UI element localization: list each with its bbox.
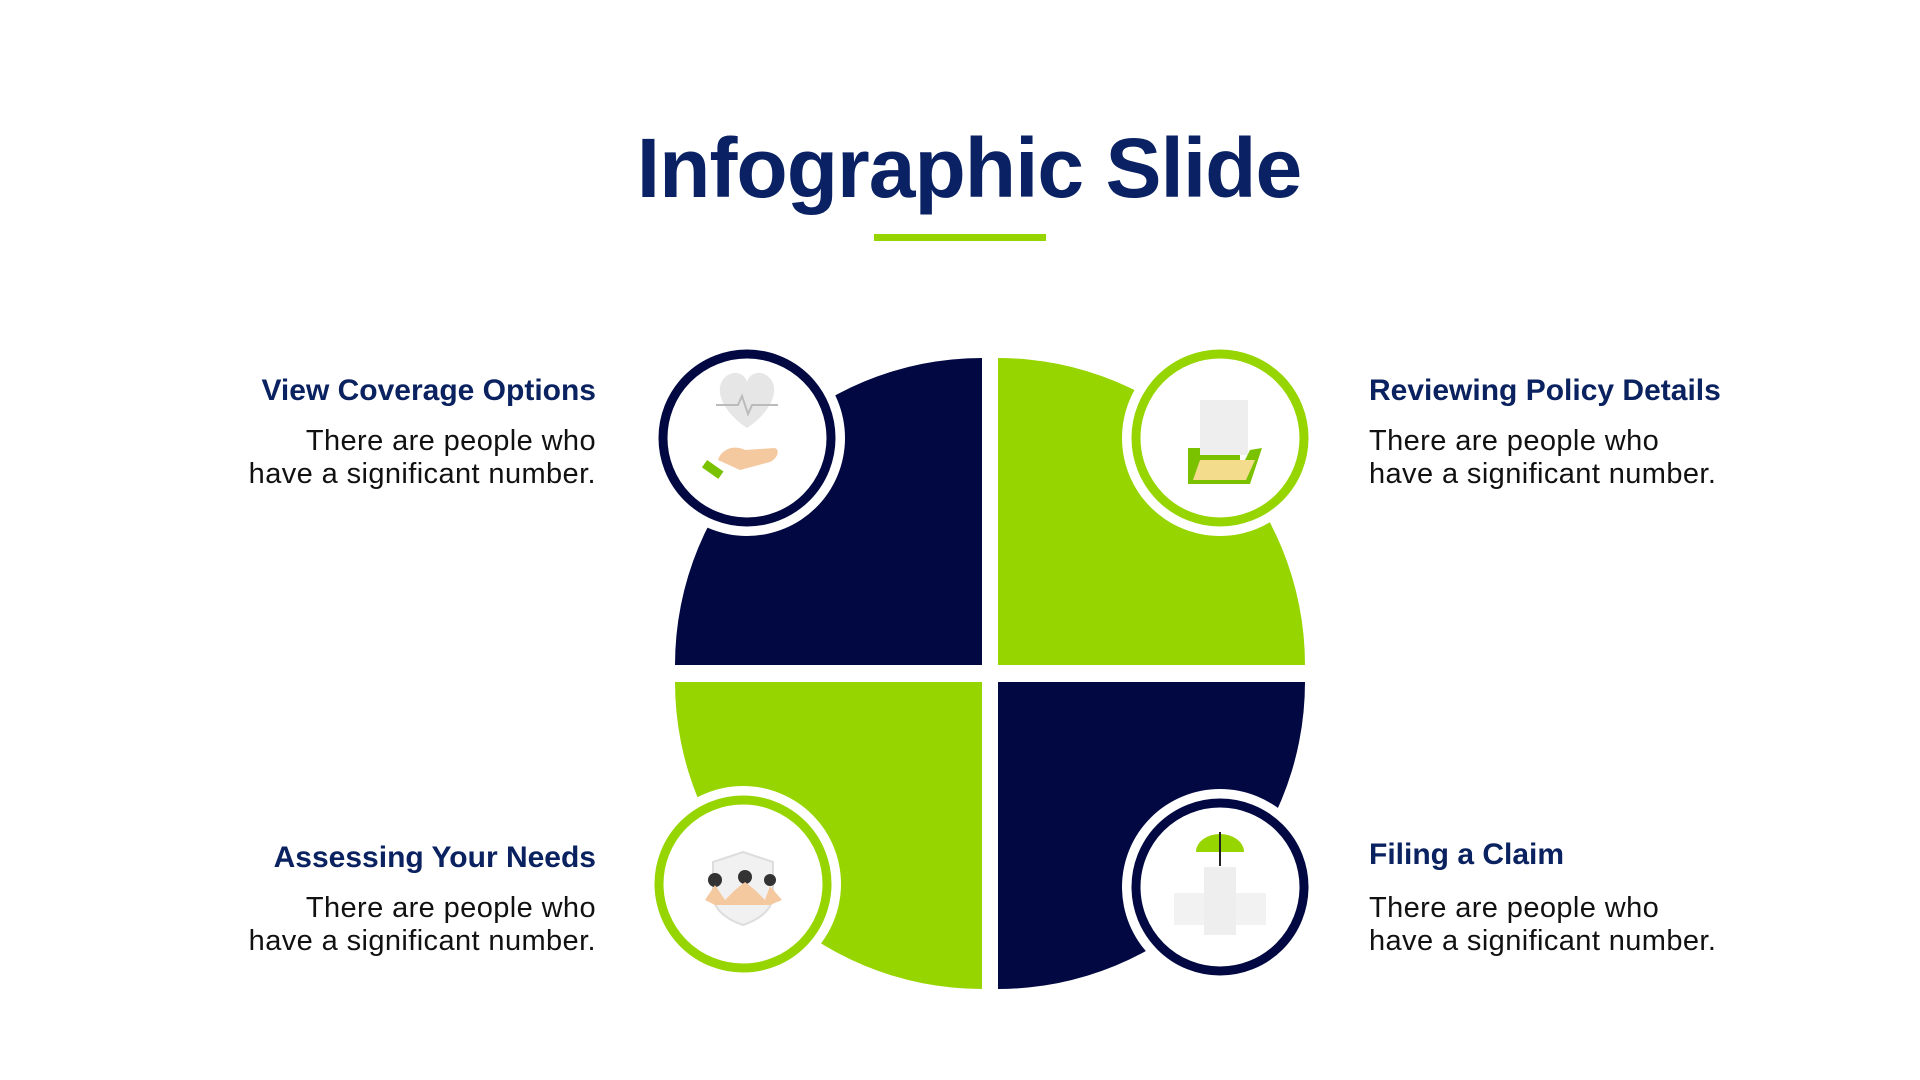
text: assessing your needs: have a significant number. (249, 925, 596, 957)
text: filing a claim: There are people who (1369, 892, 1659, 924)
text: view coverage options: There are people who (306, 425, 596, 457)
quadrant: bottom-right navy (998, 682, 1305, 989)
text: assessing your needs (249, 841, 596, 957)
icon circle: policy folder (1122, 340, 1318, 536)
icon circle: people shield (645, 786, 841, 982)
title underline (874, 234, 1046, 241)
text: filing a claim: Filing a Claim (1369, 838, 1564, 871)
text: view coverage options (249, 374, 596, 490)
text: filing a claim: have a significant number. (1369, 925, 1716, 957)
text: assessing your needs: There are people who (306, 892, 596, 924)
quadrant: top-left navy (675, 358, 982, 665)
icon circle: umbrella building (1122, 789, 1318, 985)
text: reviewing policy details: have a significant number. (1369, 458, 1716, 490)
text: view coverage options: View Coverage Options (261, 374, 596, 407)
text: view coverage options: have a significant number. (249, 458, 596, 490)
text: reviewing policy details: Reviewing Policy Details (1369, 374, 1721, 407)
quadrant: top-right green (998, 358, 1305, 665)
icon circle: heart hand (649, 340, 845, 536)
text: filing a claim (1369, 838, 1716, 957)
quadrant: bottom-left green (675, 682, 982, 989)
title: Infographic Slide (637, 121, 1301, 215)
text: reviewing policy details (1369, 374, 1721, 490)
text: assessing your needs: Assessing Your Needs (274, 841, 596, 874)
text: reviewing policy details: There are people who (1369, 425, 1659, 457)
